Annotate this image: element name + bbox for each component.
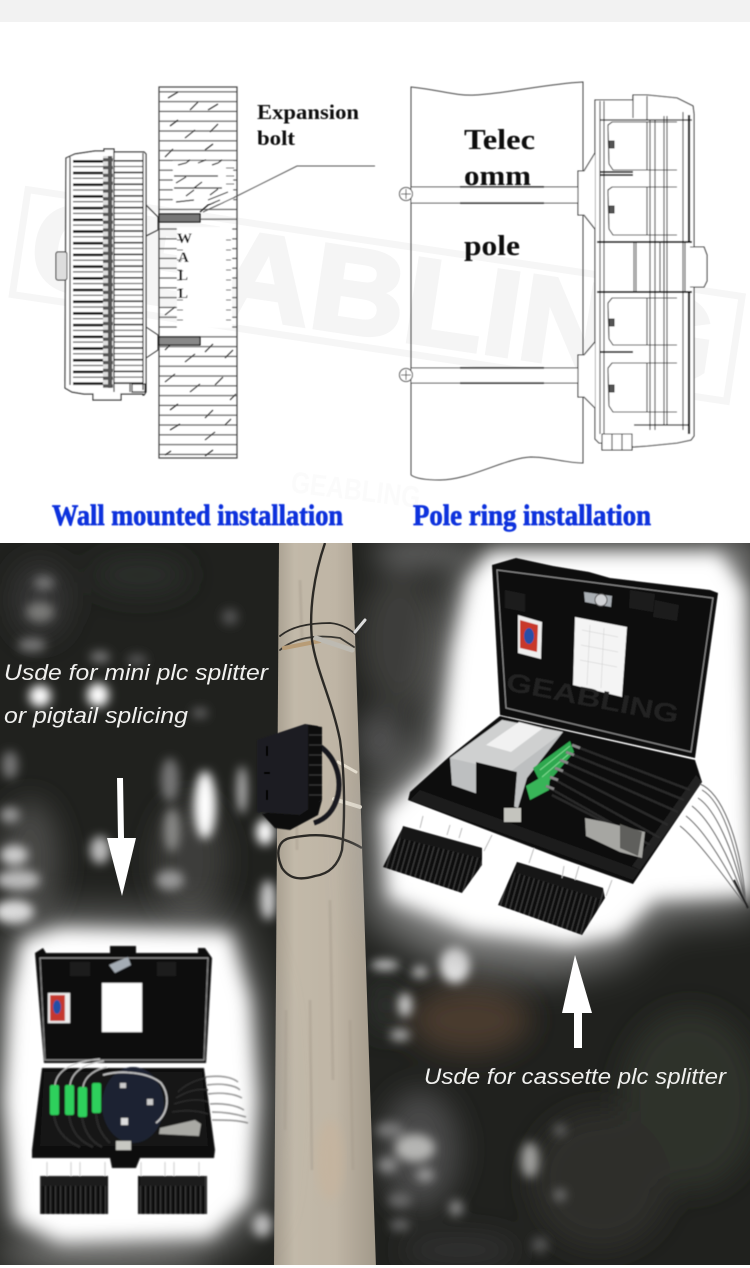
lid watermark: GEABLING [504, 666, 681, 729]
pole label: pole [464, 230, 520, 262]
telecom pole outline [411, 82, 583, 480]
left comb cover [40, 1162, 108, 1214]
enclosure side view [56, 149, 158, 400]
expansion bolt label: Expansion [257, 100, 359, 124]
photo panel [0, 533, 750, 1268]
cassette module [450, 720, 563, 808]
leader line [203, 166, 375, 212]
blurred forest background [0, 533, 750, 1268]
base tray [408, 716, 702, 884]
white paper [573, 617, 627, 697]
text: mini plc usage [4, 660, 270, 728]
mini enclosure on pole [257, 724, 339, 830]
cable gland [585, 818, 645, 858]
open lid [492, 558, 718, 758]
fibres [55, 1059, 107, 1087]
open lid [35, 946, 212, 1063]
wide grey halo: cassette product [365, 545, 750, 975]
drop wires [680, 784, 746, 906]
wall [159, 87, 237, 458]
product: mini splitter box [32, 946, 248, 1214]
base tray [32, 1068, 215, 1168]
green adapters [533, 741, 574, 785]
product: cassette splitter box [383, 558, 748, 935]
pigtails [546, 745, 690, 845]
left comb cover [383, 816, 492, 893]
white halo: cassette product [382, 552, 750, 945]
text: mini plc usage: Usde for mini plc splitter [4, 660, 270, 685]
pole label: omm [464, 160, 531, 192]
caption: wall mounted: Wall mounted installation [52, 499, 343, 532]
diagram: wall mounted installation [56, 87, 375, 458]
wall label letters: L [178, 268, 188, 284]
expansion bolt label [257, 100, 359, 150]
green adapters [50, 1083, 101, 1117]
splice tray disc [102, 1067, 164, 1143]
lock [109, 957, 131, 973]
text: mini plc usage: or pigtail splicing [4, 703, 189, 728]
drop cable [278, 543, 362, 878]
wall label letters [177, 231, 192, 302]
faint secondary watermark: GEABLING [289, 466, 422, 515]
enclosure side view [578, 95, 707, 450]
pole label: Telec [464, 124, 535, 156]
expansion bolts [159, 214, 200, 345]
arrow: down to mini box [107, 778, 136, 896]
lock [584, 592, 612, 607]
arrow: up to cassette box [562, 955, 592, 1048]
pole label [464, 124, 535, 262]
cable gland [159, 1120, 201, 1136]
captions [52, 499, 651, 532]
right comb cover [138, 1162, 207, 1214]
wall label letters: A [178, 250, 189, 266]
right comb cover [498, 848, 612, 935]
drop wires [205, 1076, 248, 1123]
wall label letters: W [177, 231, 192, 247]
warning label [518, 615, 542, 659]
wide grey halo: mini product [0, 912, 270, 1255]
diagram: pole ring installation [400, 82, 707, 480]
watermark: GEABLING logo: GEABLING [22, 176, 725, 412]
white halo: mini product [4, 928, 257, 1243]
steel straps on pole [280, 620, 365, 807]
warning label [48, 993, 70, 1023]
text: cassette plc usage: Usde for cassette plc splitter [424, 1064, 728, 1089]
concrete pole [274, 543, 376, 1268]
wall label letters: L [178, 286, 188, 302]
white paper [102, 983, 142, 1032]
top grey strip [0, 0, 750, 22]
ring straps [400, 187, 593, 383]
expansion bolt label: bolt [257, 126, 295, 150]
caption: pole ring: Pole ring installation [413, 499, 651, 532]
